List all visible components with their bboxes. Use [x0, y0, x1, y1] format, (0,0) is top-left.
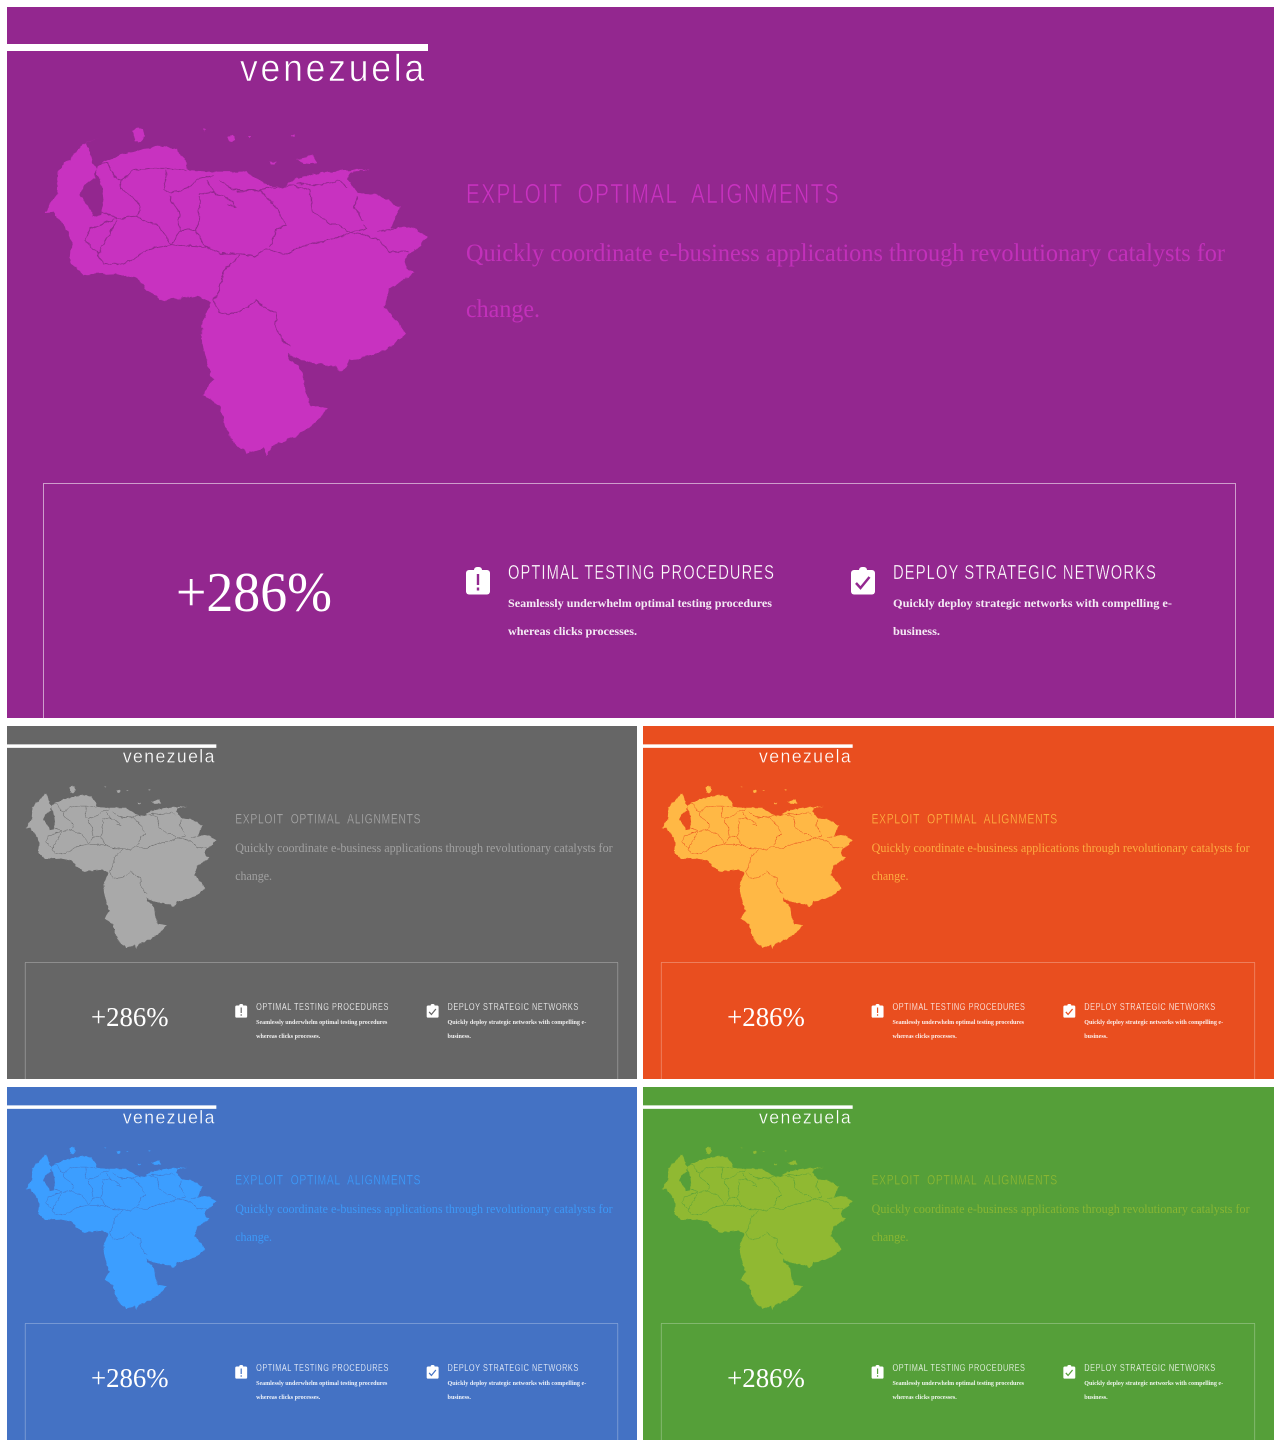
statistic: +286%	[176, 562, 332, 624]
feature: testing procedures: Seamlessly underwhelm optimal testing procedures	[256, 1020, 388, 1026]
map of Venezuela	[662, 1146, 852, 1309]
feature: strategic networks	[448, 1002, 586, 1040]
description	[872, 841, 1250, 883]
feature: strategic networks: Quickly deploy strategic networks with compelling e-	[1084, 1381, 1223, 1387]
description: change.	[235, 1230, 272, 1244]
statistic: +286%	[91, 1363, 169, 1394]
description	[872, 1202, 1250, 1244]
feature: strategic networks: business.	[1084, 1395, 1108, 1401]
feature: strategic networks: business.	[448, 1395, 471, 1401]
title: venezuela	[123, 747, 216, 768]
feature: testing procedures	[508, 562, 775, 638]
description: change.	[235, 869, 272, 883]
description	[466, 240, 1226, 323]
header rule	[643, 1105, 853, 1109]
feature: testing procedures: Seamlessly underwhelm optimal testing procedures	[256, 1381, 388, 1387]
panel: blue slide	[7, 1087, 637, 1440]
feature: testing procedures: whereas clicks processes.	[893, 1395, 957, 1401]
title: venezuela	[759, 747, 852, 768]
panel: green slide	[643, 1087, 1274, 1440]
feature: strategic networks: Quickly deploy strategic networks with compelling e-	[1084, 1020, 1223, 1026]
heading: EXPLOIT OPTIMAL ALIGNMENTS	[872, 810, 1058, 826]
header rule	[7, 1105, 216, 1109]
map of Venezuela	[26, 785, 216, 948]
description: change.	[872, 1230, 908, 1244]
feature: testing procedures: OPTIMAL TESTING PROCEDURES	[893, 1002, 1025, 1013]
icon: clipboard check	[427, 1004, 439, 1018]
feature: testing procedures: OPTIMAL TESTING PROCEDURES	[508, 562, 775, 584]
description: change.	[466, 296, 540, 323]
title: venezuela	[123, 1108, 216, 1129]
heading: EXPLOIT OPTIMAL ALIGNMENTS	[235, 1171, 421, 1187]
feature: strategic networks: DEPLOY STRATEGIC NETWORKS	[1084, 1363, 1216, 1374]
feature: strategic networks: DEPLOY STRATEGIC NETWORKS	[448, 1363, 579, 1374]
feature: testing procedures: whereas clicks processes.	[256, 1034, 321, 1040]
feature: strategic networks	[1084, 1002, 1223, 1040]
feature: testing procedures	[256, 1002, 389, 1040]
feature: strategic networks: business.	[1084, 1034, 1108, 1040]
description	[235, 1202, 613, 1244]
feature: testing procedures	[256, 1363, 389, 1401]
panel: orange slide	[643, 726, 1274, 1079]
feature: testing procedures: Seamlessly underwhelm optimal testing procedures	[893, 1381, 1025, 1387]
feature: testing procedures: Seamlessly underwhelm optimal testing procedures	[508, 596, 772, 610]
feature: testing procedures: Seamlessly underwhelm optimal testing procedures	[893, 1020, 1025, 1026]
icon: clipboard check	[1063, 1004, 1075, 1018]
title: venezuela	[759, 1108, 852, 1129]
feature: testing procedures: whereas clicks processes.	[508, 624, 637, 638]
statistic: +286%	[727, 1002, 805, 1033]
stats box	[661, 963, 1255, 1079]
feature: testing procedures	[893, 1002, 1025, 1040]
description: Quickly coordinate e-business applications through revolutionary catalysts for	[235, 841, 613, 855]
map of Venezuela	[26, 1146, 216, 1309]
statistic: +286%	[91, 1002, 169, 1033]
feature: testing procedures: OPTIMAL TESTING PROCEDURES	[893, 1363, 1025, 1374]
description	[235, 841, 613, 883]
feature: strategic networks	[448, 1363, 586, 1401]
description: Quickly coordinate e-business applications through revolutionary catalysts for	[872, 841, 1250, 855]
feature: strategic networks: Quickly deploy strategic networks with compelling e-	[448, 1381, 586, 1387]
heading: EXPLOIT OPTIMAL ALIGNMENTS	[235, 810, 421, 826]
feature: strategic networks: DEPLOY STRATEGIC NETWORKS	[448, 1002, 579, 1013]
feature: testing procedures	[893, 1363, 1025, 1401]
icon: clipboard alert	[872, 1365, 884, 1379]
feature: testing procedures: OPTIMAL TESTING PROCEDURES	[256, 1002, 389, 1013]
feature: strategic networks: DEPLOY STRATEGIC NETWORKS	[893, 562, 1157, 584]
stats box	[661, 1324, 1255, 1440]
feature: testing procedures: whereas clicks processes.	[256, 1395, 321, 1401]
feature: strategic networks: Quickly deploy strategic networks with compelling e-	[448, 1020, 586, 1026]
icon: clipboard alert	[235, 1365, 247, 1379]
icon: clipboard check	[1063, 1365, 1075, 1379]
map of Venezuela	[662, 785, 852, 948]
feature: strategic networks: Quickly deploy strategic networks with compelling e-	[893, 596, 1172, 610]
stats box	[25, 1324, 618, 1440]
icon: clipboard check	[427, 1365, 439, 1379]
feature: strategic networks: business.	[893, 624, 940, 638]
header rule	[7, 744, 216, 748]
feature: testing procedures: whereas clicks processes.	[893, 1034, 957, 1040]
feature: strategic networks: business.	[448, 1034, 471, 1040]
stats box	[44, 484, 1236, 718]
description: Quickly coordinate e-business applications through revolutionary catalysts for	[872, 1202, 1250, 1216]
header rule	[7, 44, 428, 51]
stats box	[25, 963, 618, 1079]
description: change.	[872, 869, 908, 883]
feature: strategic networks	[1084, 1363, 1223, 1401]
statistic: +286%	[727, 1363, 805, 1394]
icon: clipboard check	[851, 567, 875, 594]
map of Venezuela	[45, 127, 427, 455]
panel: purple main slide	[7, 7, 1274, 718]
heading: EXPLOIT OPTIMAL ALIGNMENTS	[466, 178, 840, 209]
feature: strategic networks: DEPLOY STRATEGIC NETWORKS	[1084, 1002, 1216, 1013]
feature: testing procedures: OPTIMAL TESTING PROCEDURES	[256, 1363, 389, 1374]
feature: strategic networks	[893, 562, 1172, 638]
icon: clipboard alert	[235, 1004, 247, 1018]
description: Quickly coordinate e-business applications through revolutionary catalysts for	[466, 240, 1226, 267]
heading: EXPLOIT OPTIMAL ALIGNMENTS	[872, 1171, 1058, 1187]
header rule	[643, 744, 853, 748]
panel: grey slide	[7, 726, 637, 1079]
icon: clipboard alert	[466, 567, 490, 594]
icon: clipboard alert	[872, 1004, 884, 1018]
description: Quickly coordinate e-business applications through revolutionary catalysts for	[235, 1202, 613, 1216]
title: venezuela	[240, 48, 427, 90]
